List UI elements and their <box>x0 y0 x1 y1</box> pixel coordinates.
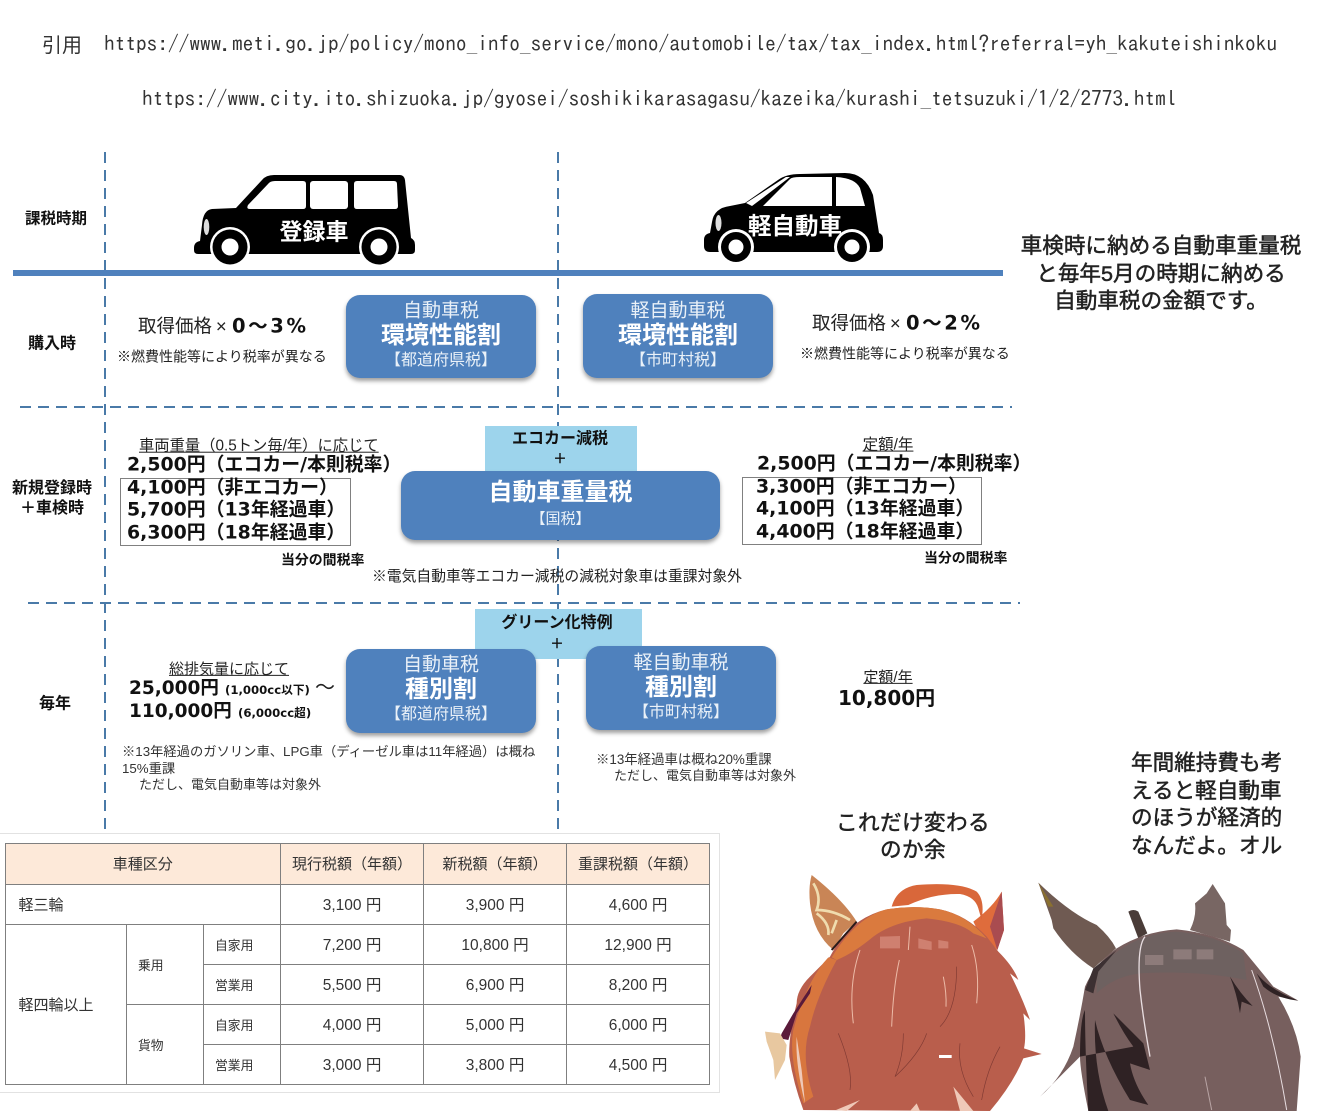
panel: type tax prefectural <box>346 649 536 733</box>
citation urls <box>42 29 1277 109</box>
speech text: dark character: えると軽自動車 <box>1131 778 1282 802</box>
table: kei tax rates: 営業用 <box>215 1058 253 1072</box>
citation urls: https://www.meti.go.jp/policy/mono_info_service/mono/automobile/tax/tax_index.html?referral=yh_kakuteishinkoku <box>104 32 1277 54</box>
text: registered weight tax amounts: 6,300円（18年経過車） <box>127 522 345 544</box>
row label: new registration and inspection: ＋車検時 <box>20 500 84 516</box>
text: registered weight tax amounts: 5,700円（13年経過車） <box>127 499 345 521</box>
side explanation: 車検時に納める自動車重量税 <box>1021 233 1301 258</box>
row label: every year: 毎年 <box>39 695 71 712</box>
panel: type tax prefectural: 種別割 <box>405 676 477 703</box>
speech text: orange character: のか余 <box>880 837 946 862</box>
label: kei car: 軽自動車 <box>748 213 842 239</box>
icon: van <box>194 175 415 264</box>
note: annual registered surcharge: 15%重課 <box>122 760 175 776</box>
text: registered weight tax amounts: 車両重量（0.5トン毎/年）に応じて <box>139 438 379 455</box>
panel: green tab: グリーン化特例 <box>501 614 613 631</box>
table: kei tax rates: 5,000 円 <box>466 1017 524 1034</box>
note: eco car exemption: ※電気自動車等エコカー減税の減税対象車は重課対象外 <box>372 569 742 585</box>
row label: purchase: 購入時 <box>28 335 76 352</box>
note: annual registered surcharge <box>122 744 535 792</box>
side explanation: と毎年5月の時期に納める <box>1036 260 1286 285</box>
panel: weight tax <box>401 471 720 540</box>
text: annual registered amounts: (6,000cc超) <box>238 706 311 720</box>
text: annual registered amounts: (1,000cc以下) <box>225 683 310 697</box>
text: acquisition rate registered: × <box>216 315 227 336</box>
text: annual kei amount <box>838 669 935 710</box>
note: annual kei surcharge <box>596 752 796 782</box>
side explanation <box>1021 233 1301 313</box>
text: kei weight tax amounts: 定額/年 <box>863 437 913 454</box>
text: annual kei amount: 定額/年 <box>863 669 913 686</box>
table: kei tax rates: 軽四輪以上 <box>18 996 94 1014</box>
note: provisional rate right: 当分の間税率 <box>924 550 1007 566</box>
text: registered weight tax amounts: 4,100円（非エコカー） <box>127 477 338 499</box>
table: kei tax rates: 8,200 円 <box>609 977 667 994</box>
table: kei tax rates: 4,000 円 <box>323 1017 381 1034</box>
panel: type tax municipal: 種別割 <box>645 674 717 701</box>
panel: environment performance municipal <box>583 294 773 378</box>
panel: environment performance prefectural <box>346 295 536 378</box>
text: kei weight tax amounts: 4,100円（13年経過車） <box>756 498 974 520</box>
note: annual registered surcharge: ただし、電気自動車等は対象外 <box>139 777 321 792</box>
table: kei tax rates: 3,000 円 <box>323 1057 381 1074</box>
table: kei tax rates: 車種区分 <box>113 856 173 873</box>
table: kei tax rates: 6,900 円 <box>466 977 524 994</box>
panel: type tax prefectural: 【都道府県税】 <box>385 706 497 723</box>
panel: kei tax table frame <box>0 833 720 1093</box>
table: kei tax rates: 自家用 <box>215 1018 253 1032</box>
table: kei tax rates: 軽三輪 <box>18 896 64 914</box>
note: annual kei surcharge: ※13年経過車は概ね20%重課 <box>596 752 772 767</box>
panel: eco car reduction tab <box>485 426 637 476</box>
table: kei tax rates: 10,800 円 <box>461 937 529 954</box>
table: kei tax rates: 重課税額（年額） <box>578 856 698 873</box>
panel: eco car reduction tab: ＋ <box>553 450 567 466</box>
panel: environment performance prefectural: 自動車税 <box>403 300 479 322</box>
row label: taxation timing: 課税時期 <box>25 211 87 228</box>
citation urls: https://www.city.ito.shizuoka.jp/gyosei/soshikikarasagasu/kazeika/kurashi_tetsuzuki/1/2/2773.html <box>142 87 1176 109</box>
text: registered weight tax amounts: 2,500円（エコカー/本則税率） <box>127 454 401 476</box>
character: dark hair head <box>1038 882 1301 1111</box>
panel: type tax municipal: 軽自動車税 <box>633 652 728 674</box>
table: kei tax rates: 新税額（年額） <box>443 856 548 873</box>
citation urls: 引用 <box>42 29 82 58</box>
table: kei tax rates: 4,500 円 <box>609 1057 667 1074</box>
table: kei tax rates: 3,900 円 <box>466 897 524 914</box>
note: annual registered surcharge: ※13年経過のガソリン車、LPG車（ディーゼル車は11年経過）は概ね <box>122 744 535 759</box>
text: acquisition rate kei: 取得価格 0～2% <box>812 311 983 334</box>
panel: type tax municipal <box>586 646 776 730</box>
row label: new registration and inspection: 新規登録時 <box>12 480 92 497</box>
label: registered car: 登録車 <box>280 218 348 244</box>
text: kei weight tax amounts: 2,500円（エコカー/本則税率） <box>757 453 1031 475</box>
speech text: orange character: これだけ変わる <box>836 810 990 835</box>
panel: environment performance prefectural: 【都道府県税】 <box>385 352 497 369</box>
table: kei tax rates: 4,600 円 <box>609 897 667 914</box>
table: kei tax rates: 自家用 <box>215 938 253 952</box>
text: acquisition rate registered: 取得価格 0～3% <box>138 314 309 337</box>
text: kei weight tax amounts <box>742 436 1031 545</box>
panel: type tax municipal: 【市町村税】 <box>633 704 729 721</box>
text: acquisition rate kei: × <box>890 312 901 333</box>
panel: environment performance municipal: 【市町村税】 <box>630 352 726 369</box>
panel: eco car reduction tab: エコカー減税 <box>512 430 608 447</box>
speech text: orange character <box>836 810 990 862</box>
table: kei tax rates: 3,100 円 <box>323 897 381 914</box>
text: annual registered amounts: 110,000円 <box>129 701 232 722</box>
speech text: dark character: なんだよ。オル <box>1131 832 1282 858</box>
table: kei tax rates: 12,900 円 <box>604 937 672 954</box>
panel: environment performance municipal: 軽自動車税 <box>630 300 726 322</box>
panel: green tab <box>475 609 642 659</box>
panel: green tab: ＋ <box>550 635 564 651</box>
note: provisional rate left: 当分の間税率 <box>281 552 364 568</box>
table: kei tax rates: 貨物 <box>138 1038 164 1052</box>
row label: new registration and inspection <box>12 479 92 516</box>
table: kei tax rates <box>5 843 710 1085</box>
text: annual registered amounts <box>129 661 335 722</box>
note: kei acquisition: ※燃費性能等により税率が異なる <box>800 345 1010 361</box>
character: orange hair head <box>765 875 1042 1111</box>
note: annual kei surcharge: ただし、電気自動車等は対象外 <box>614 768 796 782</box>
text: registered weight tax amounts <box>120 437 401 546</box>
text: annual registered amounts: 総排気量に応じて <box>169 661 289 678</box>
text: kei weight tax amounts: 3,300円（非エコカー） <box>756 476 967 498</box>
icon: kei car <box>704 173 883 262</box>
text: annual registered amounts: ～ <box>315 677 335 699</box>
panel: type tax prefectural: 自動車税 <box>403 654 479 676</box>
text: annual kei amount: 10,800円 <box>838 686 935 710</box>
text: kei weight tax amounts: 4,400円（18年経過車） <box>756 521 974 543</box>
panel: weight tax: 自動車重量税 <box>488 479 632 506</box>
text: annual registered amounts: 25,000円 <box>129 678 219 699</box>
table: kei tax rates: 営業用 <box>215 978 253 992</box>
panel: environment performance prefectural: 環境性能割 <box>381 322 501 349</box>
table: kei tax rates: 3,800 円 <box>466 1057 524 1074</box>
side explanation: 自動車税の金額です。 <box>1054 288 1268 313</box>
speech text: dark character <box>1131 750 1282 858</box>
table: kei tax rates: 7,200 円 <box>323 937 381 954</box>
panel: environment performance municipal: 環境性能割 <box>618 322 738 349</box>
table: kei tax rates: 現行税額（年額） <box>292 856 412 873</box>
speech text: dark character: 年間維持費も考 <box>1131 750 1282 775</box>
table: kei tax rates: 乗用 <box>138 958 164 972</box>
table: kei tax rates: 6,000 円 <box>609 1017 667 1034</box>
table: kei tax rates: 5,500 円 <box>323 977 381 994</box>
note: registered acquisition: ※燃費性能等により税率が異なる <box>117 348 327 364</box>
speech text: dark character: のほうが経済的 <box>1131 805 1282 830</box>
panel: weight tax: 【国税】 <box>530 510 590 528</box>
